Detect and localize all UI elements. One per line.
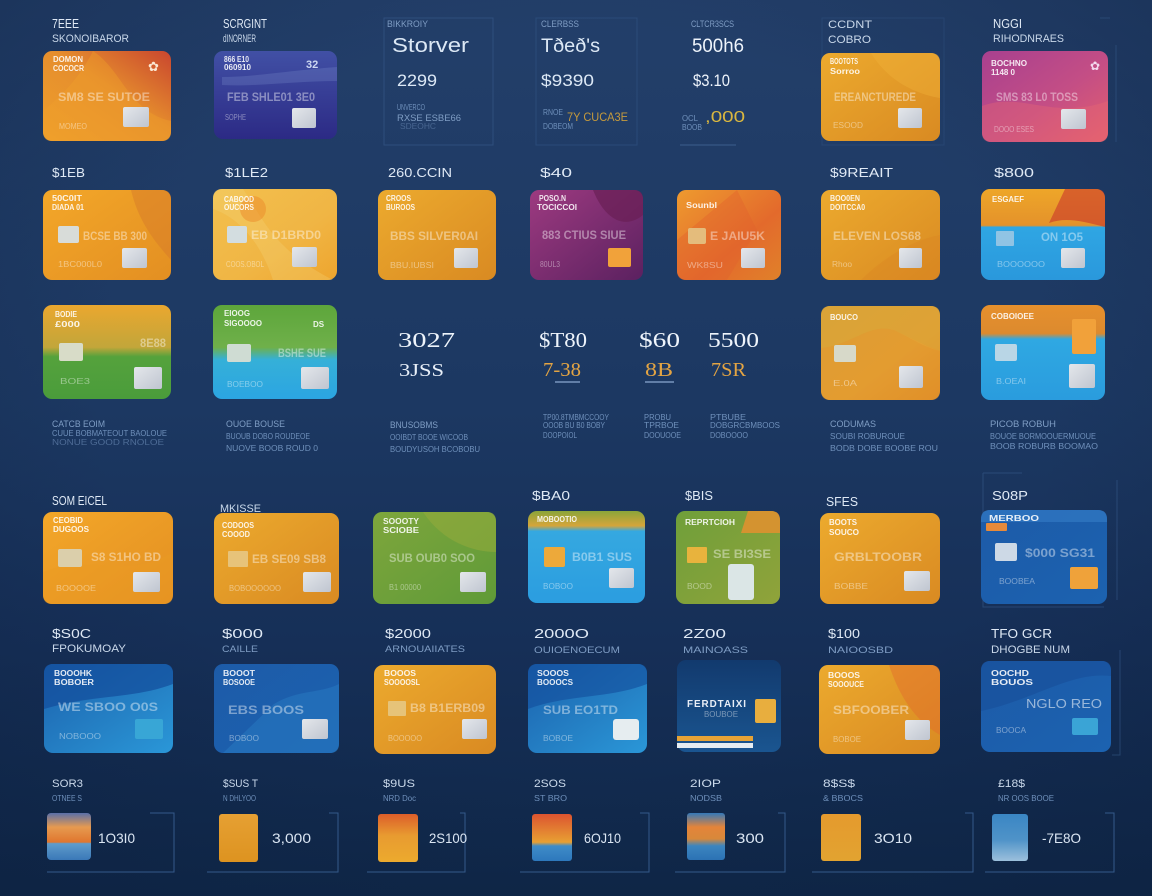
column 1 row 1 card: DOMON [53,55,83,64]
prices block: 8B [645,359,673,381]
row 2 card 6: BOO0EN [830,194,860,203]
row 5 headings: $S0C [52,626,91,641]
row 4 card 3: B1 00000 [389,583,422,592]
bottom item 2: $SUS T [223,778,258,790]
row 4 card 7: $000 SG31 [1025,548,1096,560]
row 5 card 2: BOOOT [223,669,255,678]
row 5 card 6: SBFOOBER [833,705,910,717]
row 2 card 7: ESGAEF [992,195,1024,204]
row 2 card 1: 50C0IT [52,194,82,203]
row 2 card 3: CROOS [386,194,412,203]
row 2 card 3: BBU.IUBSI [390,261,434,270]
descriptions row: PICOB ROBUH [990,419,1056,429]
row 5 card 1: BOBOER [54,678,94,687]
bottom item 5: 2IOP [690,778,721,790]
row 4 card 3 [373,512,496,604]
row 5 card 3: BOOOOO [388,734,422,743]
row 2 card 1: 1BC000L0 [58,260,103,269]
row 5 headings: NAIOOSBD [828,645,894,655]
column 6 row 1 heading [822,18,944,145]
row 4 card 5: BOOD [687,582,712,591]
descriptions row: BOOB ROBURB BOOMAO [990,442,1098,451]
row 3 card 2: BOEBOO [227,380,263,389]
row 2 card 4: TOCICCOI [537,203,577,212]
column 7 row 1 card: SMS 83 L0 TOSS [996,92,1078,104]
row 2 card 5: Sounbl [686,201,717,210]
row 5 card 2: BOBOO [229,734,259,743]
row 3 card 7: B.OEAI [996,377,1026,386]
prices block: 7-38 [543,359,581,381]
prices block: 7SR [711,359,747,381]
bottom item 3: $9US [383,778,415,790]
row 5 card 1: BOOOHK [54,669,92,678]
bottom item 7: NR OOS BOOE [998,794,1054,803]
row 5 card 6: BOBOE [833,735,861,744]
bottom item 1 [47,778,174,872]
row 2 headings: $9REAIT [830,165,893,180]
bottom item 6: & BBOCS [823,794,863,803]
row 2 card 4: 883 CTIUS SIUE [542,230,626,242]
column 6 row 1 card: EREANCTUREDE [834,92,916,104]
row 2 card 7: BOOOOOO [997,260,1045,269]
descriptions row: BODB DOBE BOOBE ROU [830,444,938,453]
row 5 headings: FPOKUMOAY [52,643,127,655]
row 2 card 2 [213,189,337,280]
column 1 row 1 heading [52,16,129,45]
prices block: 3027 [398,328,455,352]
plan panel: starter: RXSE ESBE66 [397,113,461,123]
row 2 card 2: COOS.OBOL [226,260,264,269]
row 5 card 7: OOCHD [991,669,1029,678]
bottom item 6: 8$S$ [823,778,855,790]
row 2 headings: 260.CCIN [388,165,452,180]
row 3 card 2: DS [313,320,325,329]
row 3 card 2: EIOOG [224,309,250,318]
row 2 card 2: EB D1BRD0 [251,230,321,242]
row 5 card 6: SOOOUCE [828,680,865,689]
row 2 card 1: BCSE BB 300 [83,231,147,243]
row 2 card 5: WK8SU [687,261,723,270]
bottom item 7: £18$ [998,778,1025,790]
row 2 card 5 [677,190,781,280]
descriptions row: BNUSOBMS [390,420,438,430]
column 2 row 1 card: SOPHE [225,113,246,122]
plan panel: starter: Storver [392,35,469,57]
column 7 row 1 heading: RIHODNRAES [993,33,1064,45]
row 4 card 4: BOBOO [543,582,573,591]
row 4 card 6: BOBBE [834,582,868,591]
row 2 card 5: E JAIU5K [710,231,766,243]
row 4 card 2 [214,513,339,604]
row 3 card 1 [43,305,171,399]
row 5 card 3 [374,665,496,754]
column 7 row 1 heading [993,16,1116,142]
row 4 card 4: MOBOOTIO [537,515,577,524]
bottom item 5 [675,778,785,872]
descriptions row: PROBU [644,413,671,422]
row 2 headings: $1LE2 [225,165,268,180]
descriptions row: OOIBDT BOOE WICOOB [390,433,468,442]
descriptions row: BOUOE BORMOOUERMUOUE [990,432,1096,441]
row 2 card 2: CABOOD [224,195,254,204]
descriptions row: DOOUOOE [644,431,681,440]
row 5 card 3: BOOOS [384,669,417,678]
row 5 card 4 [528,664,647,753]
plan panel: classic: RNOE [543,108,563,117]
row 3 card 1: 8E88 [140,338,167,350]
row 2 card 6: DOITCCA0 [830,203,865,212]
row 3 card 7 [981,305,1105,400]
row 4 card 4: B0B1 SUS [572,552,632,564]
row 4 card 5: REPRTCIOH [685,518,735,527]
column 6 row 1 card: Sorroo [830,67,860,76]
column 1 row 1 card [43,51,171,141]
bottom item 4 [520,778,649,872]
prices block [398,328,759,383]
row 4 headings: S08P [992,488,1028,503]
plan panel: premium: BOOB [682,123,702,132]
column 6 row 1 card [821,53,940,141]
column 1 row 1 card: MOMEO [59,122,87,131]
column 2 row 1 card [214,51,337,139]
column 7 row 1 card: DOOO ESES [994,125,1034,134]
bottom item 7: -7E8O [1042,830,1081,846]
column 2 row 1 heading: dINORNER [223,33,256,45]
row 4 card 3: SOOOTY [383,517,420,526]
row 2 card 6: ELEVEN LOS68 [833,231,922,243]
row 4 card 2: COOOD [222,530,250,539]
column 2 row 1 card: FEB SHLE01 3E0 [227,92,315,104]
column 7 row 1 card [982,51,1108,142]
plan panel: premium: $3.10 [693,71,730,90]
row 4 card 3: SUB OUB0 SOO [389,553,475,565]
descriptions row: BOUDYUSOH BCOBOBU [390,445,480,454]
descriptions row: DOOPOIOL [543,431,577,440]
descriptions row: NUOVE BOOB ROUD 0 [226,444,319,453]
plan panel: classic: $9390 [541,71,594,90]
row 2 card 4: 80UL3 [540,260,560,269]
row 4 card 7 [981,510,1107,604]
column 6 row 1 heading: COBRO [828,34,871,46]
row 3 card 2: SIGOOOO [224,319,262,328]
descriptions row: CUUE BOBMATEOUT BAOLOUE [52,429,167,438]
column 7 row 1 card: 1148 0 [991,68,1016,77]
prices block: $T80 [539,328,587,352]
bottom item 4: ST BRO [534,794,567,803]
row 5 card 1: WE SBOO O0S [58,702,158,714]
row 5 card 2 [214,664,339,753]
row 4 card 2: CODOOS [222,521,255,530]
row 3 card 2 [213,305,337,399]
row 2 card 6: Rhoo [832,260,853,269]
row 4 card 2: EB SE09 SB8 [252,554,327,566]
row 5 headings: 2000O [534,626,589,641]
row 2 card 6 [821,190,940,280]
descriptions row: TPRBOE [644,421,679,430]
row 4 card 6: BOOTS [829,518,858,527]
column 6 row 1 card: BOOTOTS [830,57,858,66]
row 3 card 1: BOE3 [60,377,91,386]
row 4 card 6 [820,513,940,604]
bottom item 5: NODSB [690,794,722,803]
bottom item 3: NRD Doc [383,794,416,803]
row 2 headings: $40 [540,165,572,180]
column 7 row 1 card: ✿ [1090,59,1100,73]
row 4 card 1: DUGOOS [53,525,90,534]
row 3 card 7: COBOIOEE [991,312,1035,321]
row 5 headings: MAINOASS [683,645,748,655]
row 4 card 1: S8 S1HO BD [91,552,161,564]
column 1 row 1 heading: SKONOIBAROR [52,33,129,45]
row 2 card 1: DIADA 01 [52,203,84,212]
column 1 row 1 heading: 7EEE [52,16,79,31]
plan panel: starter: 2299 [397,71,437,90]
bottom item 6 [812,778,973,872]
row 2 card 4 [530,190,643,280]
bottom item 7 [985,778,1114,872]
row 4 card 7: MERBOO [989,514,1039,523]
descriptions row: OOOB BU B0 BOBY [543,421,606,430]
row 5 card 5: FERDTAIXI [687,699,747,710]
bottom item 3 [367,778,467,872]
descriptions row: NONUE GOOD RNOLOE [52,438,164,447]
prices block: $60 [639,328,680,352]
row 5 headings: DHOGBE NUM [991,644,1070,656]
row 4 headings [52,473,1117,607]
plan panel: starter: BIKKROIY [387,19,428,29]
plan panel: premium: 500h6 [692,36,744,57]
descriptions row: DOBOOOO [710,431,748,440]
prices block: 5500 [708,328,759,352]
row 5 card 3: SOOOOSL [384,678,420,687]
row 5 card 7: BOOCA [996,726,1027,735]
row 2 card 3 [378,190,496,280]
row 4 card 3: SCIOBE [383,526,420,535]
bottom item 4: 2SOS [534,778,566,790]
descriptions row: OUOE BOUSE [226,419,285,429]
descriptions row: DOBGRCBMBOOS [710,421,780,430]
row 5 card 1 [44,664,173,753]
descriptions row: CATCB EOIM [52,419,105,429]
row 2 card 3: BUROOS [386,203,416,212]
bottom item 1: SOR3 [52,778,83,790]
row 4 card 7: BOOBEA [999,577,1036,586]
column 7 row 1 heading: NGGI [993,16,1022,31]
row 4 headings: SFES [826,494,858,509]
row 4 headings: $BA0 [532,488,570,503]
row 5 card 3: B8 B1ERB09 [410,703,485,715]
column 2 row 1 card: 32 [306,59,318,71]
plan panel: classic: CLERBSS [541,19,579,29]
row 5 headings: TFO GCR [991,626,1052,641]
plan panel: starter [384,18,493,145]
row 2 card 7: ON 1O5 [1041,232,1084,244]
row 5 card 2: BOSOOE [223,678,256,687]
plan panel: premium: OCL [682,114,699,123]
row 5 card 4: BOOOCS [537,678,574,687]
row 5 card 4: SUB EO1TD [543,705,618,717]
descriptions row: CODUMAS [830,419,876,429]
row 3 card 1: BODIE [55,310,78,319]
bottom item 1: 1O3I0 [98,830,135,846]
row 5 card 4: BOBOE [543,734,573,743]
row 2 card 3: BBS SILVER0AI [390,231,478,243]
bottom item 2: 3,000 [272,830,311,846]
row 5 card 7 [981,661,1111,752]
plan panel: starter: SDEOHC [400,122,436,131]
plan panel: premium: ,000 [705,109,745,126]
row 4 card 4 [528,511,645,603]
row 4 card 1 [43,512,173,604]
column 6 row 1 card: ESOOD [833,121,863,130]
row 4 headings: $BIS [685,488,713,503]
row 5 headings: $2000 [385,626,431,641]
bottom item 4: 6OJ10 [584,830,621,846]
column 1 row 1 card: SM8 SE SUTOE [58,92,150,104]
row 5 card 4: SOOOS [537,669,570,678]
bottom item 2: N DHLYOO [223,794,256,803]
descriptions row [52,413,1098,454]
row 5 headings: $100 [828,626,860,641]
row 5 headings: CAILLE [222,644,258,654]
row 4 card 2: BOBOOOOOO [229,584,281,593]
row 2 headings: $1EB [52,165,85,180]
column 1 row 1 card: COCOCR [53,64,84,73]
plan panel: premium: CLTCR3SCS [691,19,734,29]
row 5 card 7: BOUOS [991,678,1034,687]
prices block: 3JSS [399,360,444,380]
row 5 card 5: BOUBOE [704,710,738,719]
row 3 card 6 [821,306,940,400]
row 5 card 7: NGLO REO [1026,696,1102,711]
row 4 card 5 [676,511,780,604]
row 2 card 1 [43,190,171,280]
bottom item 2 [207,778,338,872]
row 4 card 6: GRBLTOOBR [834,552,923,564]
row 5 card 6 [819,665,940,754]
row 4 headings: MKISSE [220,503,261,515]
bottom item 3: 2S100 [429,830,467,846]
row 2 headings [52,165,1034,180]
row 5 card 1: NOBOOO [59,732,101,741]
row 5 card 5 [677,660,781,752]
row 2 card 4: POSO.N [539,194,566,203]
descriptions row: TP00.8TMBMCCOOY [543,413,610,422]
column 6 row 1 heading: CCDNT [828,19,872,31]
row 3 card 6: E.0A [833,379,858,388]
row 3 card 6: BOUCO [830,313,858,322]
descriptions row: PTBUBE [710,413,746,422]
plan panel: classic: 7Y CUCA3E [567,110,628,124]
bottom item 6: 3O10 [874,830,912,846]
column 2 row 1 heading [223,16,267,45]
row 3 card 1: £000 [55,320,81,329]
plan panel: classic: DOBEOM [543,122,573,131]
row 4 card 5: SE BI3SE [713,549,771,561]
row 4 headings: SOM EICEL [52,493,107,508]
column 7 row 1 card: BOCHNO [991,59,1027,68]
row 5 card 2: EBS BOOS [228,705,304,717]
row 5 headings: ARNOUAIIATES [385,644,465,654]
bottom item 5: 300 [736,830,764,846]
row 5 headings [52,626,1120,755]
descriptions row: BUOUB DOBO ROUDEOE [226,432,310,441]
row 2 headings: $800 [994,165,1034,180]
plan panel: classic [536,18,637,145]
row 5 headings: OUIOENOECUM [534,645,620,655]
row 4 card 6: SOUCO [829,528,859,537]
plan panel: classic: Tðeð's [541,36,600,57]
column 2 row 1 heading: SCRGINT [223,16,267,31]
row 5 card 6: BOOOS [828,671,861,680]
row 5 headings: 2Z00 [683,626,726,641]
row 4 card 1: CEOBID [53,516,83,525]
row 2 card 2: OUCORS [224,203,255,212]
bottom item 1: OTNEE S [52,794,82,803]
row 2 card 7 [981,189,1105,280]
column 1 row 1 card: ✿ [148,59,159,74]
column 2 row 1 card: 866 E10 [224,55,249,64]
row 4 card 1: BOOOOE [56,584,96,593]
descriptions row: SOUBI ROBUROUE [830,432,905,441]
column 2 row 1 card: 060910 [224,63,252,72]
plan panel: premium [680,19,745,145]
row 5 headings: $000 [222,626,263,641]
row 3 card 2: BSHE SUE [278,348,326,360]
plan panel: starter: UNVERCO [397,103,425,112]
